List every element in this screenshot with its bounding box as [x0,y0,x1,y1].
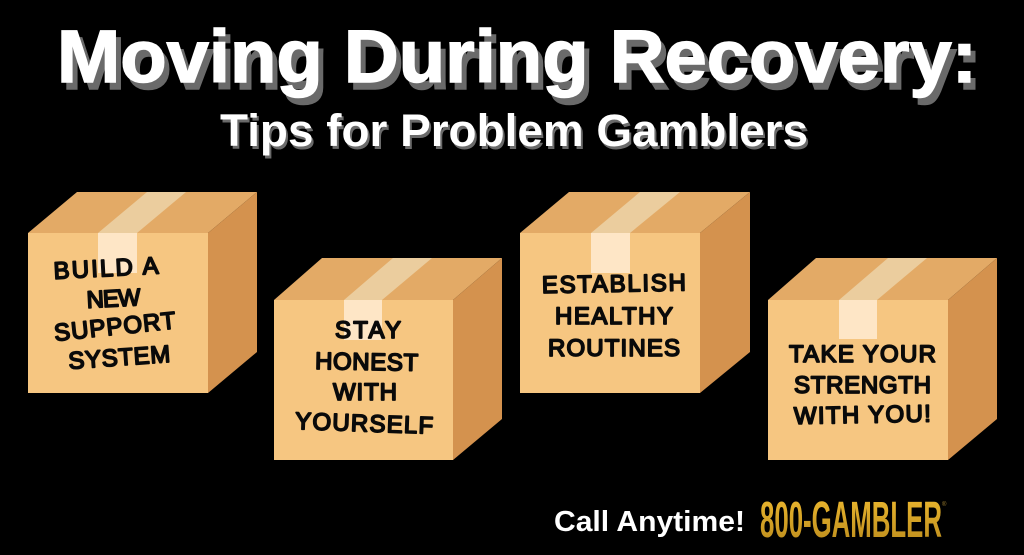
box 1 label: SYSTEM [68,341,171,375]
box 1 label [53,253,177,375]
title: Moving During Recovery: [57,15,977,98]
box 3 label: ROUTINES [548,335,680,362]
box 4 label: WITH YOU! [794,401,931,430]
box 3 label [542,269,686,362]
box 2 label: STAY [335,317,401,344]
box 1 label: SUPPORT [53,307,177,347]
box 3 label: ESTABLISH [542,269,686,299]
subtitle: Tips for Problem Gamblers [220,105,808,156]
box 2 label [295,317,434,440]
subtitle: Tips for Problem Gamblers [222,108,810,159]
box 2 label: HONEST [315,348,419,377]
box 4: take your strength with you [768,258,997,460]
logo: 800-GAMBLER: ® [942,501,947,508]
box 1 label: NEW [86,284,142,314]
box 4 label: STRENGTH [794,372,931,399]
box 2 label: WITH [333,379,397,406]
call to action: Call Anytime! [554,506,745,538]
title: Moving During Recovery: [62,22,982,105]
box 1: build a new support system [28,192,257,393]
box 2 label: YOURSELF [295,408,434,440]
box 2: stay honest with yourself [274,258,502,460]
box 4 label [789,341,936,430]
box 3: establish healthy routines [520,192,750,393]
box 1 label: BUILD A [53,253,159,285]
box 4 label: TAKE YOUR [789,341,936,368]
box 3 label: HEALTHY [555,303,673,330]
